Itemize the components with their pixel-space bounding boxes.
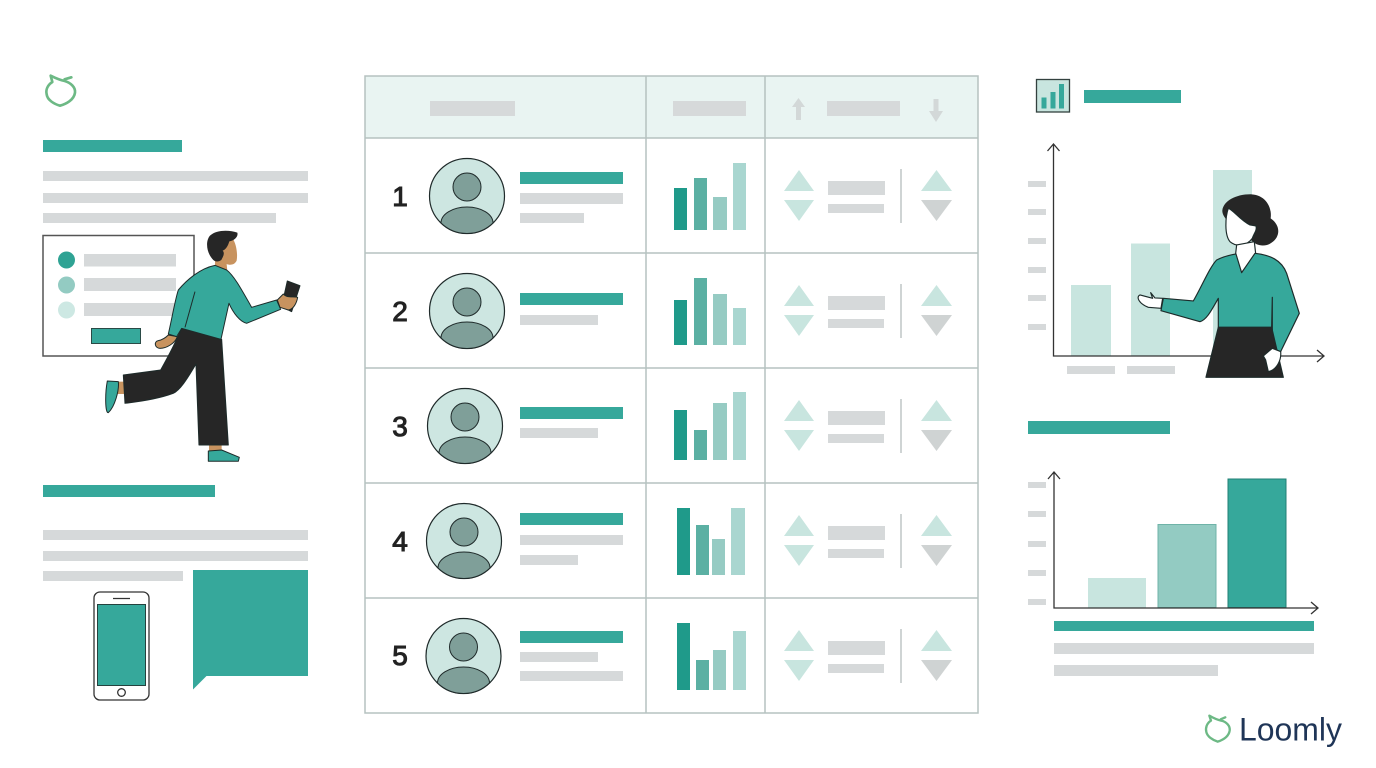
bars 3 (674, 392, 746, 460)
row 2 (392, 274, 952, 348)
row 5 (392, 618, 952, 694)
chart: upper bar chart (1028, 144, 1324, 374)
icon: smartphone (94, 592, 149, 700)
icon: Loomly mark (1206, 716, 1230, 742)
chart: lower bar chart (1028, 472, 1318, 614)
row 4 (392, 504, 952, 578)
icon: top-left logo (46, 76, 75, 106)
icon: speech bubble (193, 570, 308, 690)
bars 2 (674, 278, 746, 345)
avatar 5 (426, 618, 501, 694)
row 5: 5 (392, 640, 408, 671)
bars 4 (677, 508, 745, 575)
row 2: 2 (392, 296, 408, 327)
text block: left intro (43, 171, 308, 223)
logo: Loomly: Loomly (1239, 712, 1342, 748)
heading: left column first (43, 140, 182, 152)
table grid (365, 76, 978, 713)
row 3: 3 (392, 411, 408, 442)
row 3 (392, 388, 952, 464)
avatar 2 (430, 274, 504, 348)
table header (365, 76, 978, 138)
text block: right lower (1054, 621, 1314, 676)
avatar 4 (426, 504, 502, 578)
row 1 (392, 158, 952, 234)
row 4: 4 (392, 526, 408, 557)
panel: board behind person (43, 236, 194, 356)
trend indicators 5 (784, 629, 952, 683)
avatar 3 (428, 388, 502, 464)
illustration: running person with phone (106, 231, 300, 461)
table: ranking (365, 76, 978, 713)
trend indicators 3 (784, 399, 952, 453)
text block: left lower (43, 530, 308, 581)
heading: right column first (1084, 90, 1181, 103)
bars 1 (674, 163, 746, 230)
row 1: 1 (392, 181, 408, 212)
bars 5 (677, 623, 746, 690)
trend indicators 1 (784, 169, 952, 223)
trend indicators 4 (784, 514, 952, 568)
illustration: presenting woman (1138, 194, 1299, 377)
icon: chart badge (1036, 80, 1070, 112)
heading: right column second (1028, 421, 1170, 434)
heading: left column second (43, 485, 215, 497)
avatar 1 (430, 158, 504, 234)
trend indicators 2 (784, 284, 952, 338)
